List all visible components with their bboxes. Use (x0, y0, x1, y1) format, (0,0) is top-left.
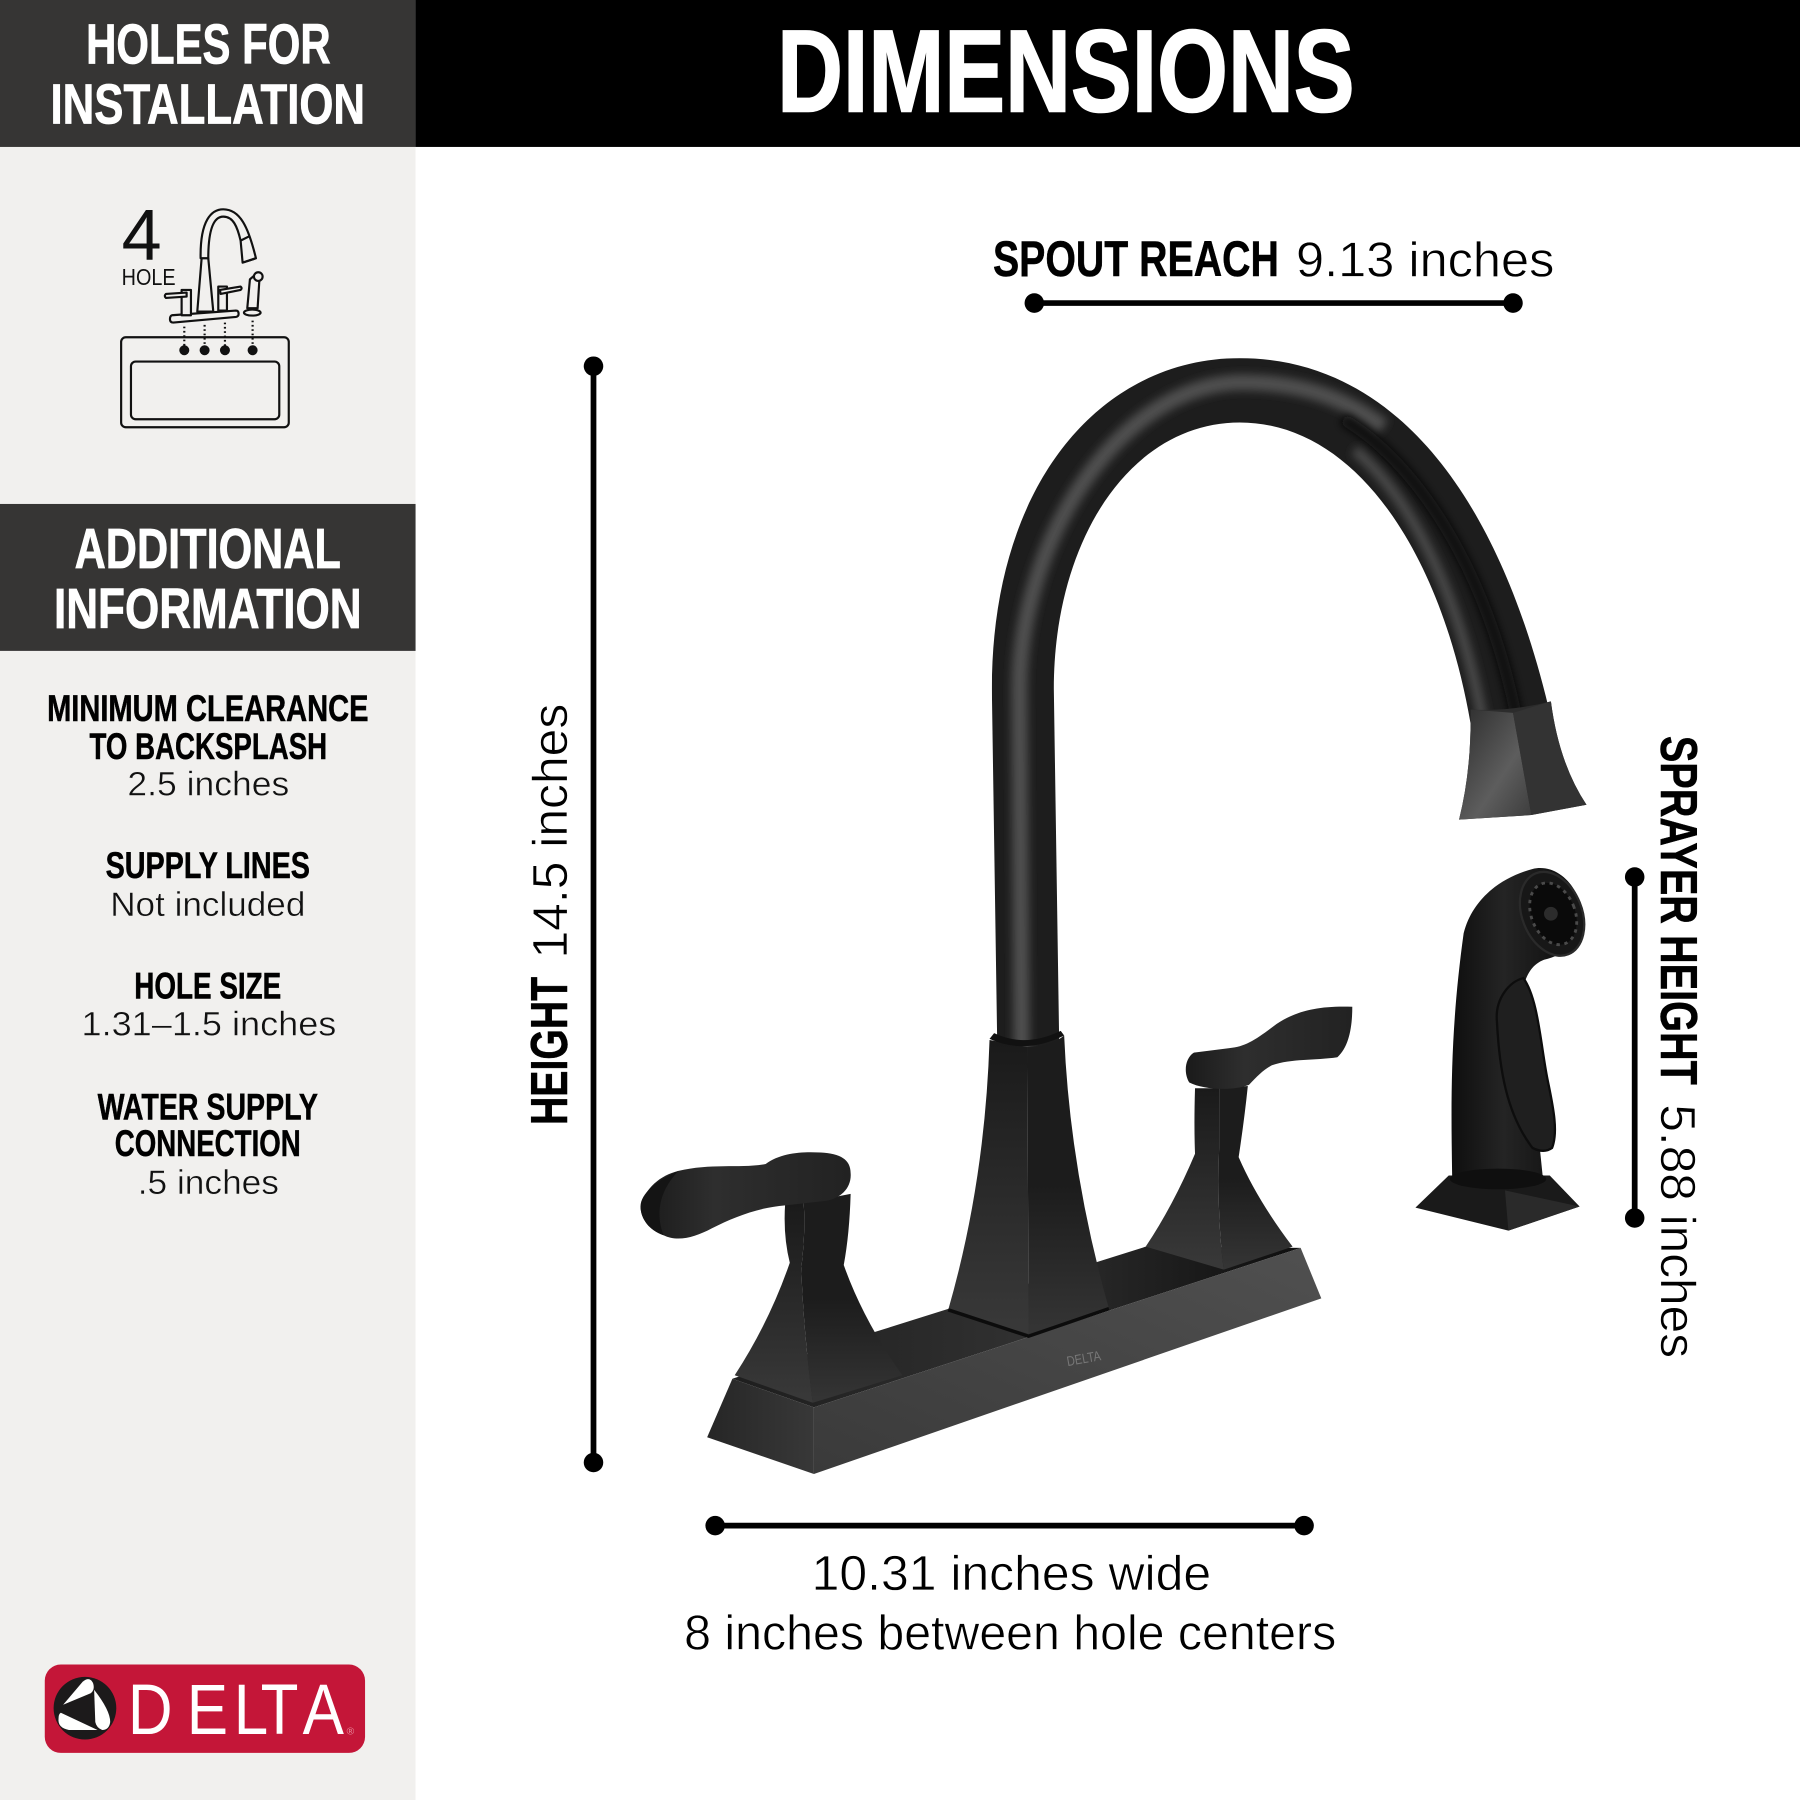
center body (948, 1031, 1109, 1336)
icon: four hole sink with faucet: HOLE (122, 264, 176, 290)
title: dimensions: DIMENSIONS (777, 5, 1355, 136)
sprayer (1415, 862, 1596, 1231)
logo: delta (45, 1665, 365, 1753)
dimension: sprayer height (1625, 736, 1708, 1358)
text block: water supply connection (98, 1086, 318, 1202)
heading: additional information (0, 504, 416, 651)
panel: left sidebar background (0, 0, 416, 1800)
text block: minimum clearance (47, 688, 368, 804)
text block: supply lines (106, 845, 310, 924)
dimension: sprayer height: SPRAYER HEIGHT (1650, 736, 1708, 1085)
logo: delta: DELTA (128, 1671, 344, 1750)
dimension: width: 8 inches between hole centers (684, 1606, 1336, 1661)
base plate: DELTA (1066, 1348, 1103, 1369)
text block: minimum clearance: TO BACKSPLASH (90, 726, 327, 767)
dimension: width: 10.31 inches wide (812, 1546, 1211, 1601)
title: dimensions (416, 0, 1800, 147)
text block: minimum clearance: MINIMUM CLEARANCE (47, 688, 368, 729)
text block: hole size (82, 966, 336, 1043)
text block: supply lines: SUPPLY LINES (106, 845, 310, 886)
text block: hole size: 1.31–1.5 inches (82, 1005, 336, 1043)
text block: water supply connection: CONNECTION (115, 1123, 301, 1164)
dimension: height: HEIGHT (520, 977, 578, 1125)
heading: holes for installation: INSTALLATION (51, 73, 365, 136)
dimension: sprayer height: 5.88 inches (1650, 1104, 1705, 1358)
text block: water supply connection: WATER SUPPLY (98, 1086, 318, 1127)
dimension: width (684, 1516, 1336, 1661)
text block: water supply connection: .5 inches (138, 1164, 279, 1202)
left handle (641, 1152, 902, 1403)
right handle (1146, 1007, 1352, 1270)
dimension: spout reach (993, 230, 1554, 313)
faucet illustration (641, 344, 1596, 1474)
heading: holes for installation: HOLES FOR (86, 14, 331, 77)
dimension: spout reach: SPOUT REACH (993, 230, 1279, 287)
text block: minimum clearance: 2.5 inches (127, 766, 289, 804)
heading: additional information: ADDITIONAL (75, 518, 341, 581)
icon: four hole sink with faucet (121, 195, 289, 427)
dimension: spout reach: 9.13 inches (1296, 233, 1554, 288)
base plate (707, 1247, 1321, 1474)
text block: hole size: HOLE SIZE (134, 966, 281, 1007)
text block: supply lines: Not included (110, 886, 305, 924)
dimension: height (520, 356, 603, 1472)
icon: four hole sink with faucet: 4 (122, 195, 162, 276)
spout head (1459, 701, 1586, 820)
spout tube (976, 344, 1561, 1079)
heading: additional information: INFORMATION (54, 578, 362, 641)
heading: holes for installation (0, 0, 416, 147)
logo: delta: ® (347, 1727, 355, 1738)
dimension: height: 14.5 inches (523, 704, 578, 959)
